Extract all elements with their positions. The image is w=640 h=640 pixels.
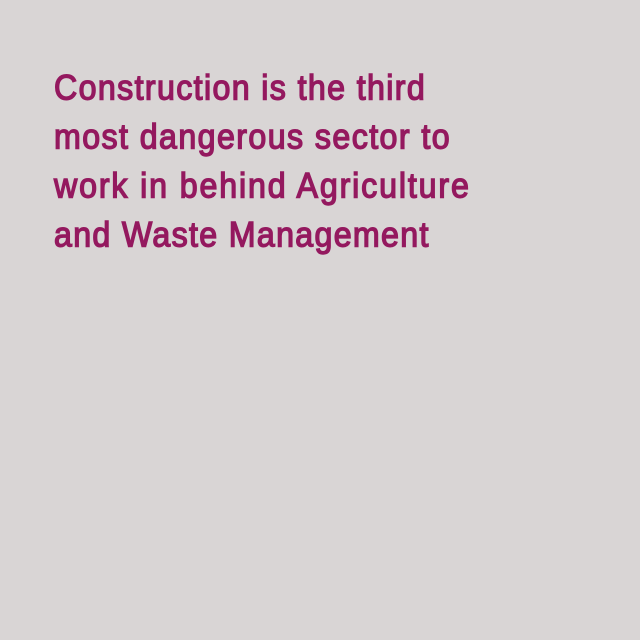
- heading: construction danger statement: Construction is the third: [54, 69, 425, 108]
- heading: construction danger statement: and Waste Management: [54, 216, 429, 255]
- heading: construction danger statement: work in behind Agriculture: [53, 167, 469, 206]
- heading: construction danger statement: [53, 69, 469, 255]
- heading: construction danger statement: most dangerous sector to: [54, 118, 450, 157]
